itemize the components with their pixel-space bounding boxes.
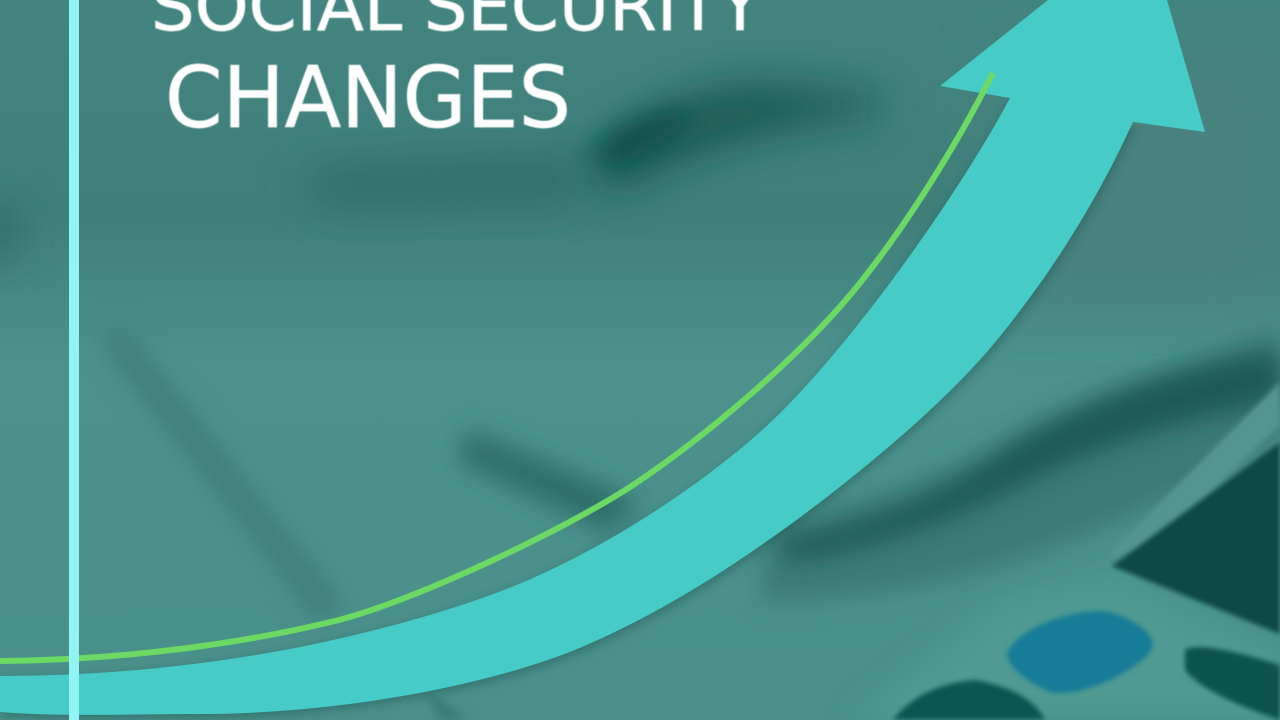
dark key right — [1185, 647, 1280, 720]
calculator edge — [1108, 382, 1280, 556]
arrow shadow — [2, 101, 1135, 718]
calculator screen — [1112, 442, 1280, 634]
calculator — [893, 382, 1280, 720]
green trend line — [0, 73, 993, 661]
title — [151, 0, 761, 148]
title line 2: CHANGES — [165, 49, 571, 148]
dark key bottom — [893, 680, 1045, 720]
vertical line — [69, 0, 79, 720]
blue key — [1007, 611, 1153, 693]
